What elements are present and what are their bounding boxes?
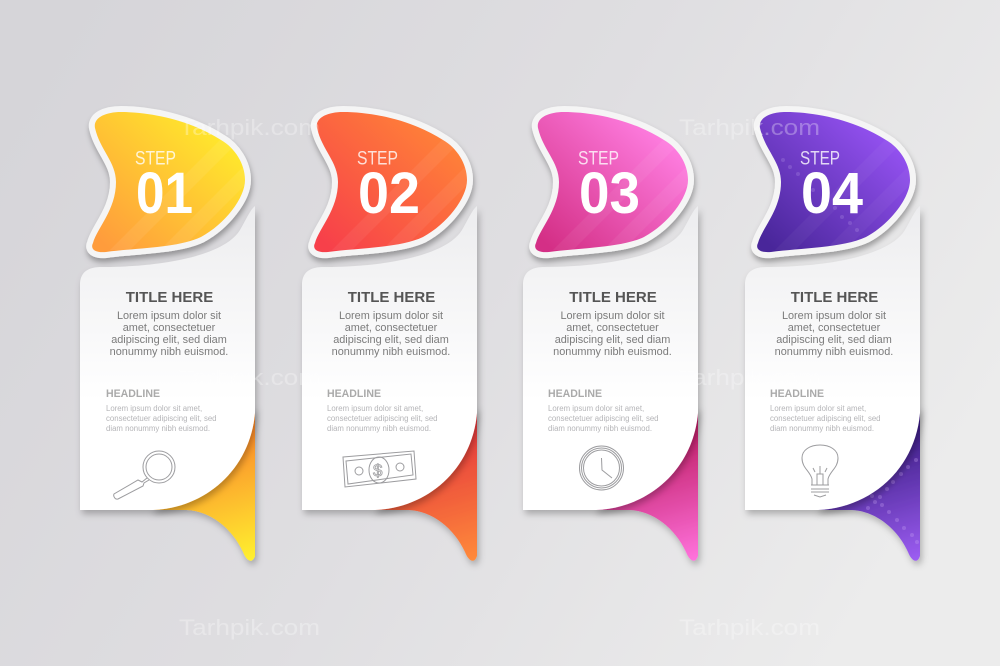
step number: 02 (358, 161, 420, 226)
panel: step 1 (80, 112, 270, 561)
card body text: adipiscing elit, sed diam (776, 334, 892, 346)
card body text: Lorem ipsum dolor sit (560, 310, 665, 322)
step badge (535, 112, 713, 260)
step label: STEP (357, 148, 398, 170)
ribbon tail (815, 405, 920, 561)
small text: consectetuer adipiscing elit, sed (770, 414, 881, 423)
text card (745, 206, 920, 510)
headline: HEADLINE (770, 388, 824, 400)
watermark: Tarhpik.com (679, 365, 820, 390)
icon: light bulb (802, 445, 838, 497)
card body text: nonummy nibh euismod. (775, 346, 893, 358)
card body text: adipiscing elit, sed diam (555, 334, 670, 346)
card body text (553, 310, 672, 358)
small text (548, 404, 659, 433)
watermark: Tarhpik.com (179, 615, 320, 640)
card body text (775, 310, 893, 358)
card body text: amet, consectetuer (345, 322, 438, 334)
card body text: adipiscing elit, sed diam (111, 334, 227, 346)
icon: banknote (343, 451, 416, 487)
card title: TITLE HERE (569, 289, 657, 306)
card body text: amet, consectetuer (123, 322, 216, 334)
watermark: Tarhpik.com (179, 115, 320, 140)
small text: consectetuer adipiscing elit, sed (106, 414, 217, 423)
step badge (92, 112, 270, 260)
small text (770, 404, 881, 433)
step badge (757, 112, 935, 260)
headline: HEADLINE (106, 388, 160, 400)
card body text: amet, consectetuer (788, 322, 881, 334)
watermark: Tarhpik.com (179, 365, 320, 390)
small text: Lorem ipsum dolor sit amet, (106, 404, 202, 413)
card body text: Lorem ipsum dolor sit (782, 310, 886, 322)
watermark: Tarhpik.com (679, 115, 820, 140)
small text: diam nonummy nibh euismod. (770, 424, 874, 433)
card body text: adipiscing elit, sed diam (333, 334, 449, 346)
ribbon tail (372, 405, 477, 561)
small text: diam nonummy nibh euismod. (106, 424, 210, 433)
card body text (110, 310, 228, 358)
panel: step 3 (523, 112, 713, 561)
text card (302, 206, 477, 510)
small text: Lorem ipsum dolor sit amet, (770, 404, 866, 413)
icon: clock (580, 446, 624, 490)
card title: TITLE HERE (791, 289, 878, 306)
small text: diam nonummy nibh euismod. (548, 424, 652, 433)
watermark: Tarhpik.com (679, 615, 820, 640)
watermark (179, 115, 820, 640)
card body text: Lorem ipsum dolor sit (117, 310, 221, 322)
small text: consectetuer adipiscing elit, sed (548, 414, 659, 423)
small text (327, 404, 438, 433)
step label: STEP (578, 148, 619, 170)
small text: consectetuer adipiscing elit, sed (327, 414, 438, 423)
panel: step 2 (302, 112, 492, 561)
icon: banknote: $ (373, 461, 383, 480)
panel: step 4 (745, 112, 935, 561)
small text: Lorem ipsum dolor sit amet, (548, 404, 644, 413)
card body text (332, 310, 450, 358)
step label: STEP (135, 148, 176, 170)
ribbon tail (150, 405, 255, 561)
text card (80, 206, 255, 510)
step badge (314, 112, 492, 260)
step number: 01 (136, 161, 193, 226)
card body text: Lorem ipsum dolor sit (339, 310, 443, 322)
step number: 04 (801, 161, 863, 226)
step label: STEP (800, 148, 840, 170)
card body text: nonummy nibh euismod. (332, 346, 450, 358)
small text: diam nonummy nibh euismod. (327, 424, 431, 433)
card title: TITLE HERE (348, 289, 435, 306)
card body text: amet, consectetuer (566, 322, 659, 334)
step number: 03 (579, 161, 640, 226)
card title: TITLE HERE (126, 289, 213, 306)
card body text: nonummy nibh euismod. (553, 346, 672, 358)
text card (523, 206, 698, 510)
headline: HEADLINE (548, 388, 602, 400)
icon: magnifying glass (114, 451, 175, 499)
card body text: nonummy nibh euismod. (110, 346, 228, 358)
small text (106, 404, 217, 433)
small text: Lorem ipsum dolor sit amet, (327, 404, 423, 413)
headline: HEADLINE (327, 388, 381, 400)
ribbon tail (593, 405, 698, 561)
